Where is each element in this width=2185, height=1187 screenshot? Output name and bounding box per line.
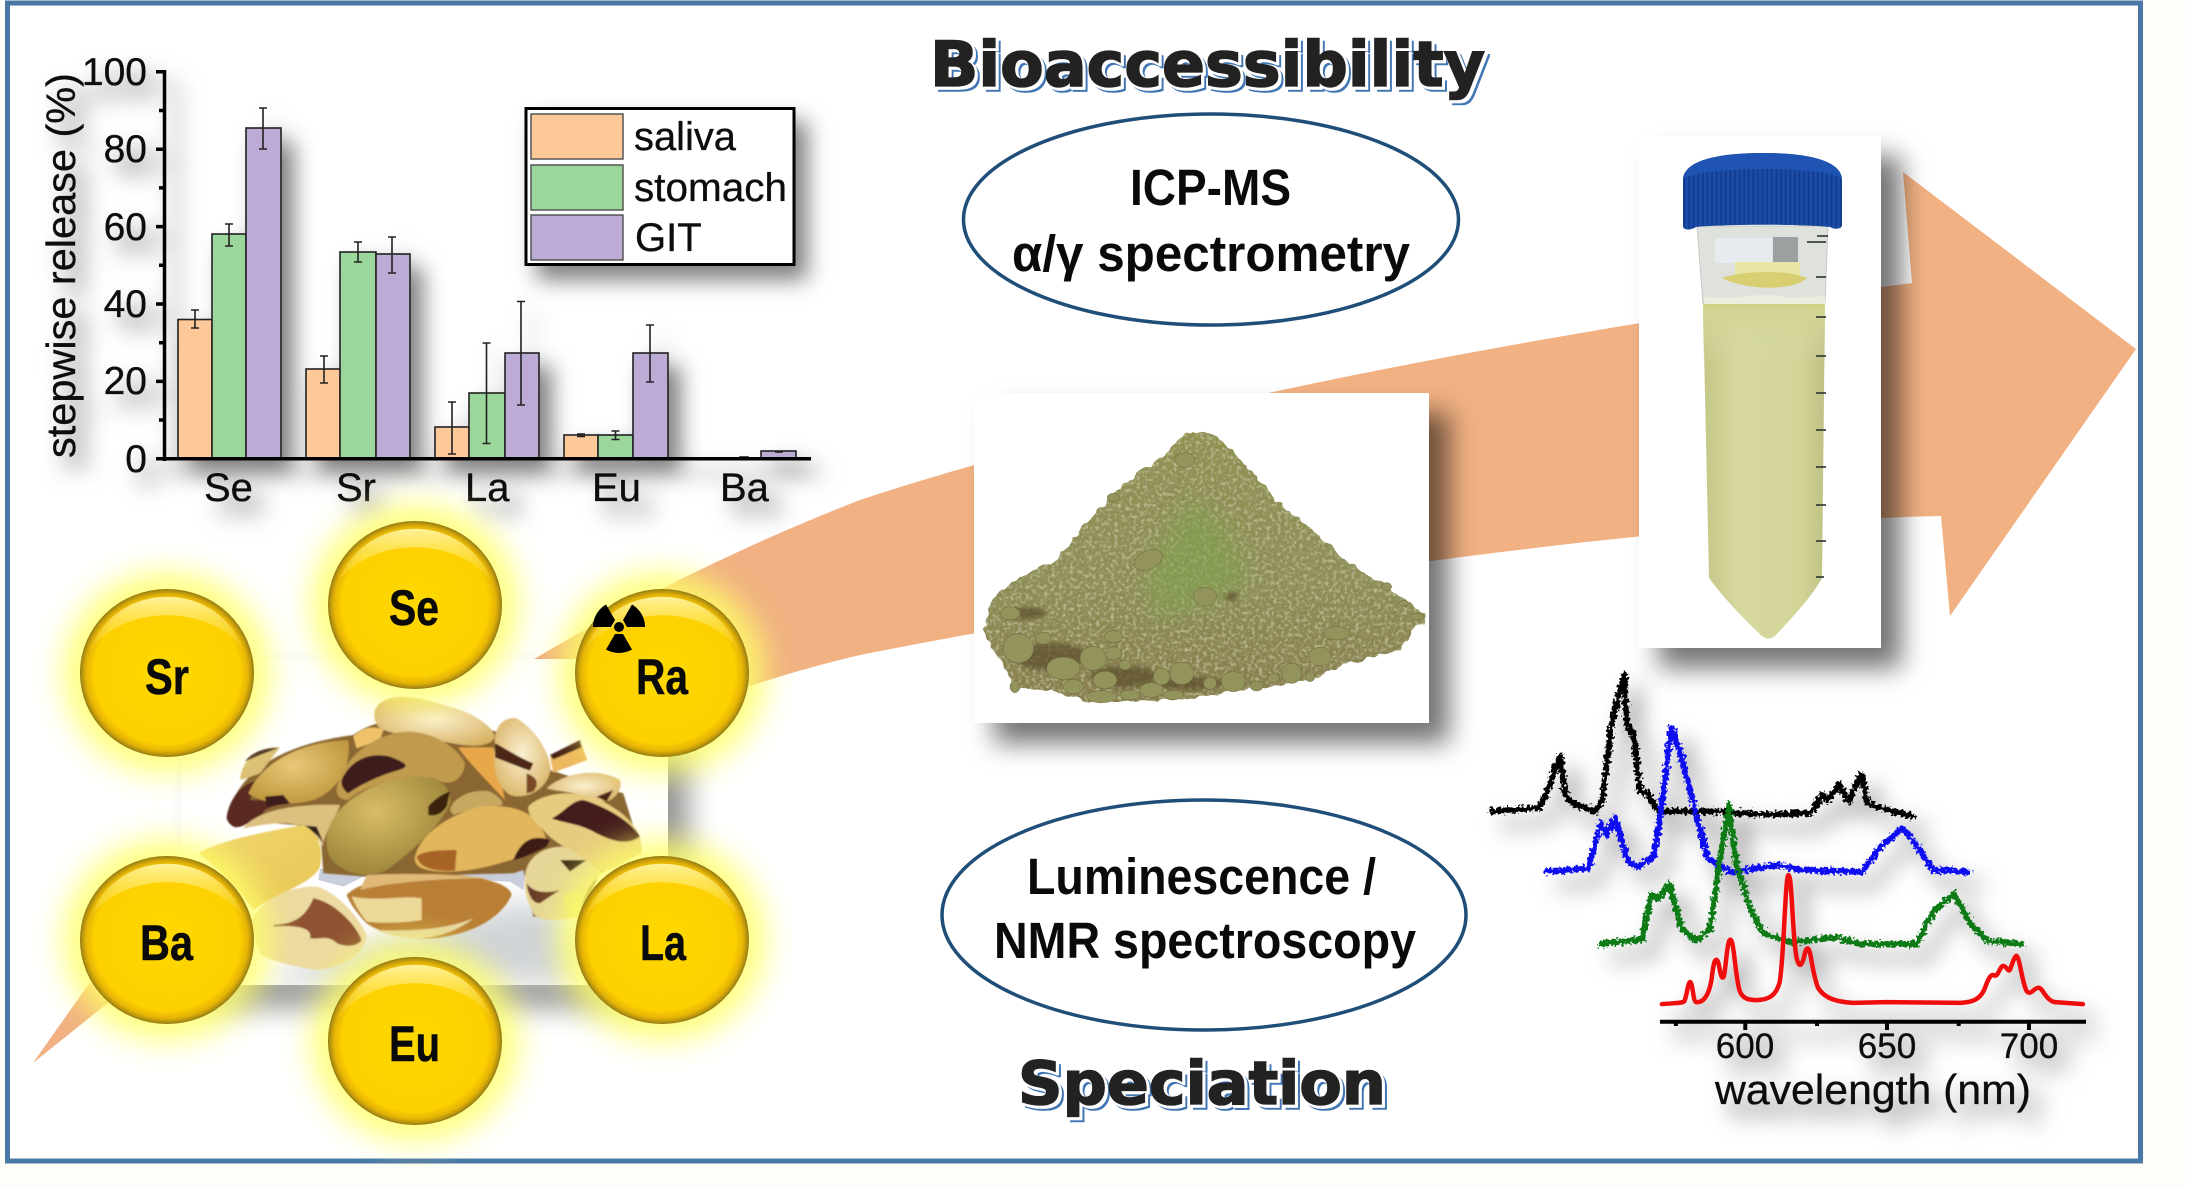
table shadow [267, 900, 578, 983]
axis numbers [1716, 1027, 2058, 1066]
legend: saliva [634, 115, 737, 159]
badge: Ba [80, 856, 254, 1024]
bars: Ba [740, 451, 796, 459]
badge: La [575, 856, 749, 1024]
white photo card [1639, 136, 1881, 648]
bars: Eu [564, 353, 668, 459]
y axis title: stepwise release (%) [38, 73, 84, 458]
oval: ICP-MS: ICP-MS [1130, 159, 1291, 216]
element badges [63, 504, 766, 1142]
inner filter window [1715, 238, 1772, 263]
powder drawing [983, 432, 1425, 703]
grey filter insert [1773, 237, 1798, 262]
bars: La [435, 353, 539, 459]
axis title: wavelength (nm) [1714, 1066, 2031, 1113]
title: Bioaccessibility: Bioaccessibility [930, 28, 1485, 101]
white photo card [974, 393, 1429, 723]
y axis numbers: 0 [125, 438, 147, 481]
badge: Ra [575, 589, 749, 757]
froth line [1704, 295, 1825, 304]
badge: Sr [80, 589, 254, 757]
badge: Eu: Eu [389, 1016, 440, 1072]
y axis numbers [82, 51, 147, 481]
badge: Eu [328, 957, 502, 1125]
badge: La: La [640, 915, 687, 971]
x axis categories [204, 466, 770, 510]
oval: Luminescence / NMR: NMR spectroscopy [994, 912, 1417, 969]
bars: Sr [306, 252, 410, 459]
oval: Luminescence / NMR [942, 800, 1466, 1030]
y axis numbers: 40 [104, 283, 147, 326]
luminescence spectra chart [1492, 675, 2086, 1113]
liquid [1703, 303, 1825, 638]
tube glass [1697, 226, 1828, 303]
pile body [983, 432, 1425, 702]
clumps [1000, 453, 1424, 703]
oval: Luminescence / NMR: Luminescence / [1027, 848, 1376, 905]
dark gaps [1007, 592, 1238, 690]
bar chart: stepwise release [38, 51, 811, 510]
badge: Ra: Ra [636, 649, 689, 705]
oval: ICP-MS [964, 114, 1458, 325]
yellow layer [1735, 262, 1800, 277]
x axis categories: Se [204, 466, 253, 510]
badge glow [63, 504, 766, 1142]
trace: blue [1546, 727, 1968, 872]
x axis categories: Ba [720, 466, 770, 510]
trace: black [1492, 675, 1912, 816]
icon: radiation trefoil [593, 604, 645, 653]
title: Speciation: Speciation [1018, 1049, 1386, 1119]
liquid top band [1703, 303, 1825, 363]
wavelength axis [1660, 1022, 2086, 1030]
y axis numbers: 60 [104, 206, 147, 249]
legend [526, 108, 794, 264]
photo: powder pile [974, 393, 1429, 723]
trace: red [1662, 875, 2083, 1004]
y axis numbers: 100 [82, 51, 147, 94]
sample dome [1722, 272, 1807, 288]
axis numbers: 600 [1716, 1027, 1774, 1066]
x axis categories: Sr [336, 466, 376, 510]
arrow: flow from nuts to tube [33, 172, 2136, 1063]
blue cap [1683, 153, 1842, 230]
white photo card [181, 659, 668, 985]
graduations [1807, 236, 1828, 577]
trace: green [1601, 805, 2022, 944]
green patch [1148, 503, 1247, 620]
nuts drawing [198, 697, 642, 983]
nut pile [198, 697, 642, 970]
badge: Se [328, 521, 502, 689]
x axis categories: Eu [592, 466, 641, 510]
bars: Se [178, 128, 281, 459]
error bars [191, 108, 783, 454]
axis numbers: 700 [2000, 1027, 2058, 1066]
plate [318, 865, 527, 890]
cap top rim [1684, 153, 1842, 178]
badge: Se: Se [389, 580, 439, 636]
legend: GIT [635, 216, 702, 260]
y axis numbers: 20 [104, 360, 147, 403]
badge: Ba: Ba [140, 915, 194, 971]
badge: Sr: Sr [145, 649, 189, 705]
x axis categories: La [465, 466, 510, 510]
y axis numbers: 80 [104, 128, 147, 171]
axis numbers: 650 [1858, 1027, 1916, 1066]
oval: ICP-MS: α/γ spectrometry [1012, 225, 1411, 282]
photo: Brazil nuts [181, 659, 668, 985]
legend: stomach [634, 166, 787, 210]
axes and ticks [156, 70, 811, 461]
photo: centrifuge tube [1639, 136, 1881, 648]
